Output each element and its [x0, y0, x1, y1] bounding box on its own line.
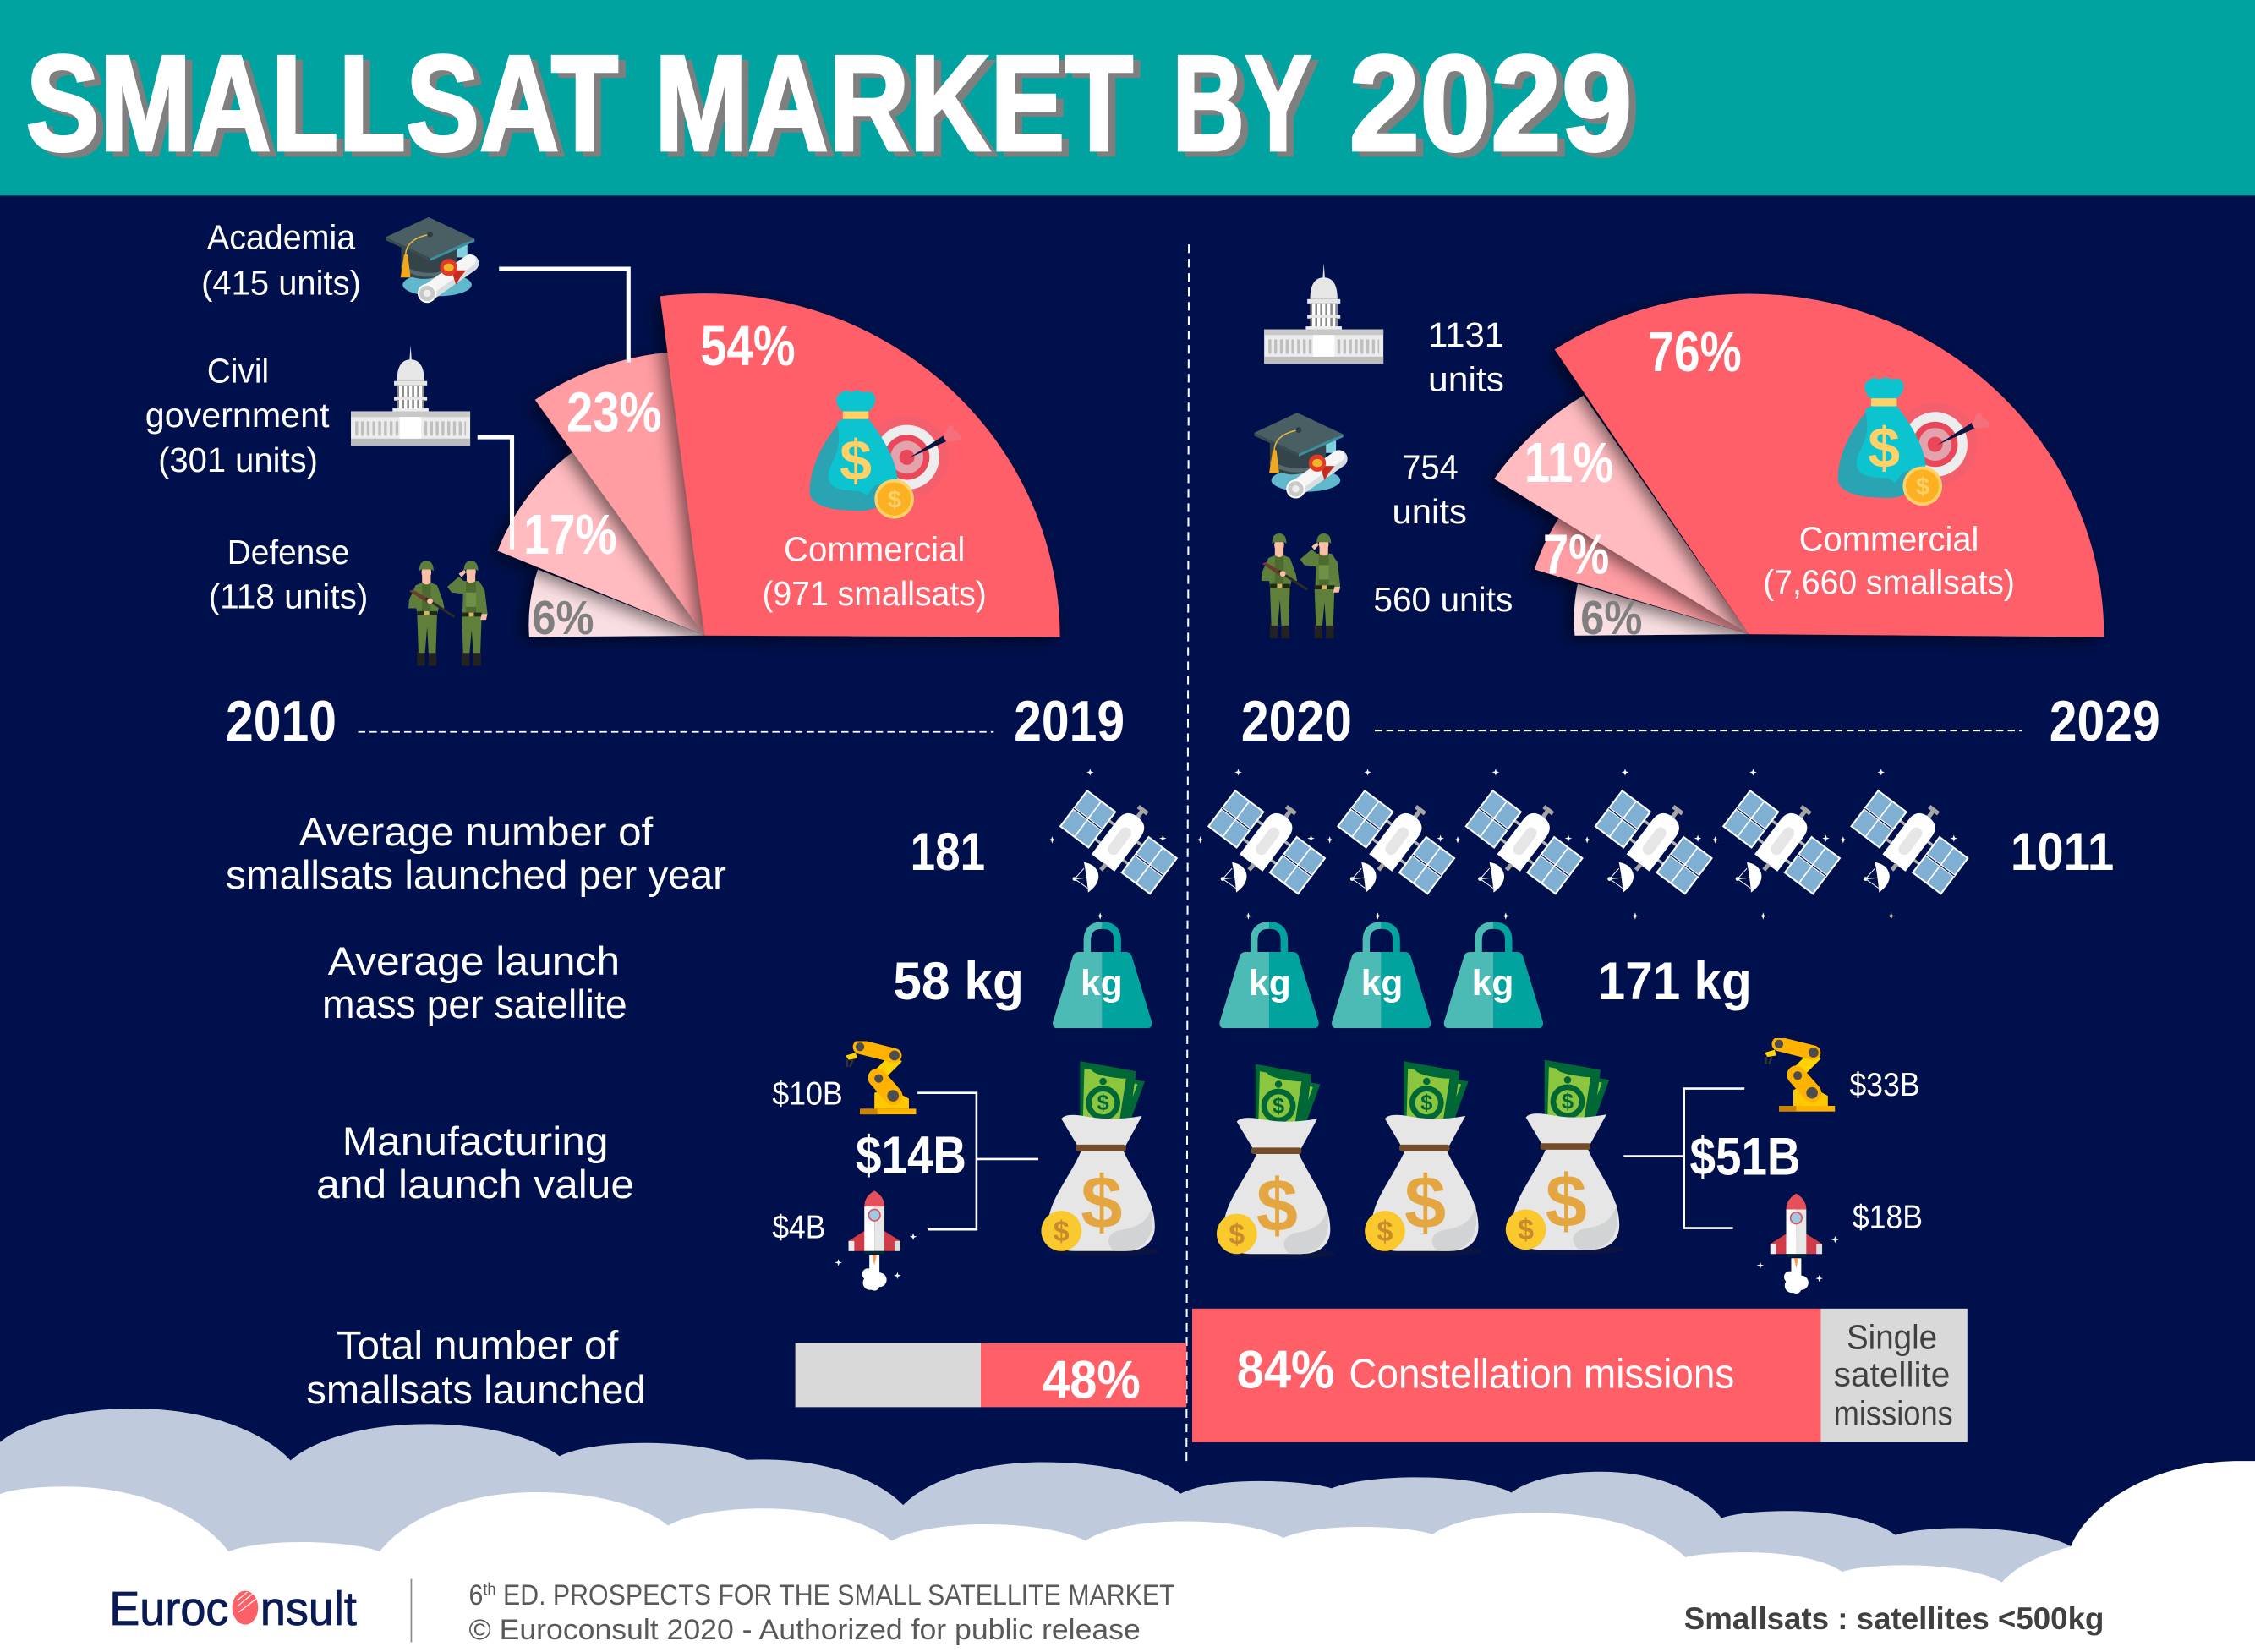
- footnote: smallsat definition: Smallsats : satellites <500kg: [1684, 1600, 2104, 1636]
- value: 58 kg: 58 kg: [893, 952, 1024, 1011]
- label: 76%: 76%: [1648, 321, 1742, 384]
- value: 181: 181: [911, 823, 985, 882]
- label: 23%: 23%: [566, 381, 661, 444]
- label: 11%: 11%: [1524, 432, 1613, 495]
- bar: 2020-2029 constellation share: missions: [1834, 1394, 1953, 1433]
- civil government label: government: [145, 396, 330, 435]
- bar: 2010-2019 constellation share: 48%: [1043, 1350, 1141, 1409]
- icon: graduation cap: [386, 217, 474, 302]
- icons: money bags 2020-2029: [1217, 1060, 1625, 1259]
- title: BY: [1172, 28, 1311, 180]
- bracket: 2020-2029 value: [1623, 1089, 1744, 1228]
- label: 1131 units: [1428, 315, 1504, 399]
- label: 560 units: 560 units: [1373, 580, 1513, 619]
- label: 54%: 54%: [700, 315, 796, 378]
- icons: money bags 2020-2029: $: [1546, 1159, 1587, 1243]
- timeline: 2020 to 2029: 2020: [1241, 689, 1352, 753]
- panel: 2010-2019 segment fan chart: [498, 293, 1060, 644]
- logo: Euroconsult: Euroc: [109, 1582, 228, 1635]
- bar: 2020-2029 constellation share: Constellation missions: [1349, 1350, 1734, 1397]
- defense label: [209, 533, 368, 615]
- icons: money bags 2020-2029: $: [1256, 1163, 1298, 1247]
- icons: money bags 2020-2029: $: [1420, 1091, 1432, 1115]
- title: MARKET: [654, 28, 1133, 180]
- row label: average launches per year: [226, 810, 726, 898]
- arrow: academia connector: [499, 269, 628, 363]
- timeline: 2010 to 2019: [226, 689, 1125, 753]
- icon: graduation cap: [1254, 413, 1344, 498]
- icons: money bags 2020-2029: $: [1518, 1214, 1534, 1246]
- footer credit text: [468, 1579, 1175, 1646]
- commercial label: Commercial: [1799, 519, 1979, 558]
- header band: [0, 0, 2255, 195]
- slice: commercial 76%: [1555, 294, 2104, 637]
- icon: soldiers: [408, 561, 488, 666]
- icons: money bags 2020-2029: $: [1273, 1095, 1284, 1119]
- civil government label: [145, 351, 330, 479]
- timeline: 2010 to 2019: 2010: [226, 689, 337, 753]
- row label: average launch mass: [322, 939, 627, 1027]
- value: $33B: $33B: [1849, 1067, 1920, 1103]
- title: [26, 28, 1639, 185]
- slice: civil government 17%: [498, 450, 704, 636]
- logo: Euroconsult: nsult: [260, 1582, 357, 1635]
- icon: money bag 2010-2019: $: [1097, 1091, 1109, 1115]
- row label: average launches per year: smallsats launched per year: [226, 853, 726, 898]
- icon: weight 2010-2019: [1053, 926, 1152, 1028]
- icon: robot arm: [846, 1042, 916, 1114]
- arrow: civil government connector: [478, 437, 512, 550]
- clouds: back layer: [0, 1409, 2071, 1652]
- label: 1131 units: units: [1428, 360, 1504, 399]
- footer credit text: ED. PROSPECTS FOR THE SMALL SATELLITE MARKET: [496, 1579, 1175, 1611]
- timeline: 2010 to 2019: 2019: [1014, 689, 1125, 753]
- label: 6%: 6%: [532, 591, 594, 644]
- row label: average launches per year: Average number of: [299, 810, 654, 855]
- title: 2029: [1356, 33, 1639, 185]
- timeline: 2020 to 2029: 2029: [2050, 689, 2160, 753]
- label: 17%: 17%: [523, 504, 617, 566]
- icon: money bag and target: $: [888, 486, 901, 513]
- icon: money bag and target: [810, 391, 961, 519]
- icon: capitol: [1264, 263, 1383, 364]
- row label: manufacturing and launch value: [316, 1119, 634, 1207]
- commercial label: [1763, 519, 2015, 601]
- row label: total number launched: [306, 1323, 646, 1413]
- value: $4B: $4B: [772, 1209, 825, 1245]
- commercial label: Commercial: [784, 529, 965, 568]
- commercial label: [762, 529, 987, 613]
- academia label: (415 units): [201, 264, 361, 303]
- icons: satellites 2010-2019: [1048, 769, 1189, 920]
- footer credit text: 6: [468, 1579, 484, 1611]
- title: 2029: [1349, 28, 1633, 180]
- row label: average launch mass: mass per satellite: [322, 982, 627, 1027]
- academia label: [201, 217, 361, 303]
- icon: rocket: [1757, 1194, 1839, 1294]
- clouds: front layer: [0, 1461, 2255, 1652]
- value: $14B: $14B: [856, 1126, 966, 1185]
- value: $18B: $18B: [1853, 1200, 1923, 1236]
- label: 7%: 7%: [1543, 524, 1609, 587]
- icon: money bag and target: [1838, 377, 1990, 506]
- bar: 2020-2029 constellation share: satellite: [1834, 1355, 1950, 1394]
- icons: weights 2020-2029: [1219, 926, 1543, 1028]
- icon: money bag and target: $: [840, 429, 872, 493]
- row label: total number launched: Total number of: [337, 1323, 619, 1368]
- defense label: Defense: [227, 533, 349, 572]
- icon: rocket: [835, 1190, 917, 1291]
- bar: 2010-2019 constellation share: [796, 1343, 1186, 1409]
- label: 1131 units: 1131: [1428, 315, 1504, 354]
- footer credit text: th: [483, 1580, 496, 1599]
- icons: weights 2020-2029: kg: [1472, 964, 1513, 1004]
- slice: academia 23%: [535, 353, 704, 636]
- icon: capitol: [351, 345, 470, 446]
- value: 171 kg: 171 kg: [1598, 952, 1752, 1011]
- icons: weights 2020-2029: kg: [1249, 964, 1291, 1004]
- slice: 11%: [1494, 396, 1749, 634]
- title: BY: [1179, 33, 1319, 185]
- icon: soldiers: [1262, 533, 1340, 638]
- civil government label: (301 units): [158, 440, 318, 479]
- row label: manufacturing and launch value: and launch value: [316, 1162, 634, 1207]
- slice: 6%: [1574, 584, 1749, 636]
- academia label: Academia: [207, 217, 355, 256]
- center dashed divider: [1186, 244, 1189, 1463]
- value: $10B: $10B: [772, 1075, 843, 1112]
- slice: commercial 54%: [660, 293, 1060, 637]
- icons: weights 2020-2029: kg: [1361, 964, 1403, 1004]
- label: 754 units: 754: [1402, 447, 1459, 486]
- icon: money bag and target: $: [1916, 473, 1929, 501]
- title: SMALLSAT: [33, 33, 626, 185]
- value: 1011: 1011: [2011, 823, 2114, 882]
- row label: total number launched: smallsats launched: [306, 1368, 646, 1413]
- slice: defense 6%: [528, 570, 704, 637]
- icon: money bag 2010-2019: $: [1081, 1161, 1122, 1244]
- bar: 2020-2029 constellation share: 84%: [1237, 1340, 1334, 1399]
- icon: money bag and target: $: [1868, 416, 1900, 480]
- title: MARKET: [661, 33, 1141, 185]
- icons: money bags 2020-2029: $: [1404, 1161, 1446, 1244]
- timeline: 2020 to 2029: [1241, 689, 2160, 753]
- panel: 2020-2029 segment fan chart: [1494, 294, 2104, 644]
- title: SMALLSAT: [26, 28, 618, 180]
- row label: average launch mass: Average launch: [328, 939, 620, 984]
- icon: money bag 2010-2019: $: [1054, 1216, 1070, 1248]
- logo: Euroconsult: [109, 1582, 357, 1635]
- slice: 7%: [1535, 517, 1749, 634]
- commercial label: (7,660 smallsats): [1763, 562, 2015, 601]
- bar: 2020-2029 constellation share: [1192, 1309, 1968, 1442]
- icon: robot arm: [1765, 1040, 1835, 1112]
- bar: 2020-2029 constellation share: Single: [1847, 1317, 1937, 1356]
- label: 754 units: [1392, 447, 1467, 531]
- commercial label: (971 smallsats): [762, 574, 987, 613]
- bracket: 2010-2019 value: [917, 1093, 1038, 1229]
- icon: money bag 2010-2019: [1041, 1061, 1161, 1256]
- civil government label: Civil: [207, 351, 269, 390]
- label: 754 units: units: [1392, 492, 1467, 531]
- icons: money bags 2020-2029: $: [1229, 1218, 1245, 1250]
- icons: money bags 2020-2029: $: [1377, 1216, 1393, 1248]
- defense label: (118 units): [209, 577, 368, 615]
- icons: money bags 2020-2029: $: [1562, 1090, 1574, 1113]
- icon: weight 2010-2019: kg: [1081, 964, 1123, 1004]
- footer credit text: © Euroconsult 2020 - Authorized for public release: [468, 1614, 1141, 1646]
- icons: satellites 2020-2029: [1196, 769, 1980, 920]
- footer divider: [410, 1579, 412, 1642]
- label: 6%: 6%: [1580, 591, 1642, 644]
- row label: manufacturing and launch value: Manufacturing: [342, 1119, 608, 1164]
- value: $51B: $51B: [1690, 1128, 1801, 1187]
